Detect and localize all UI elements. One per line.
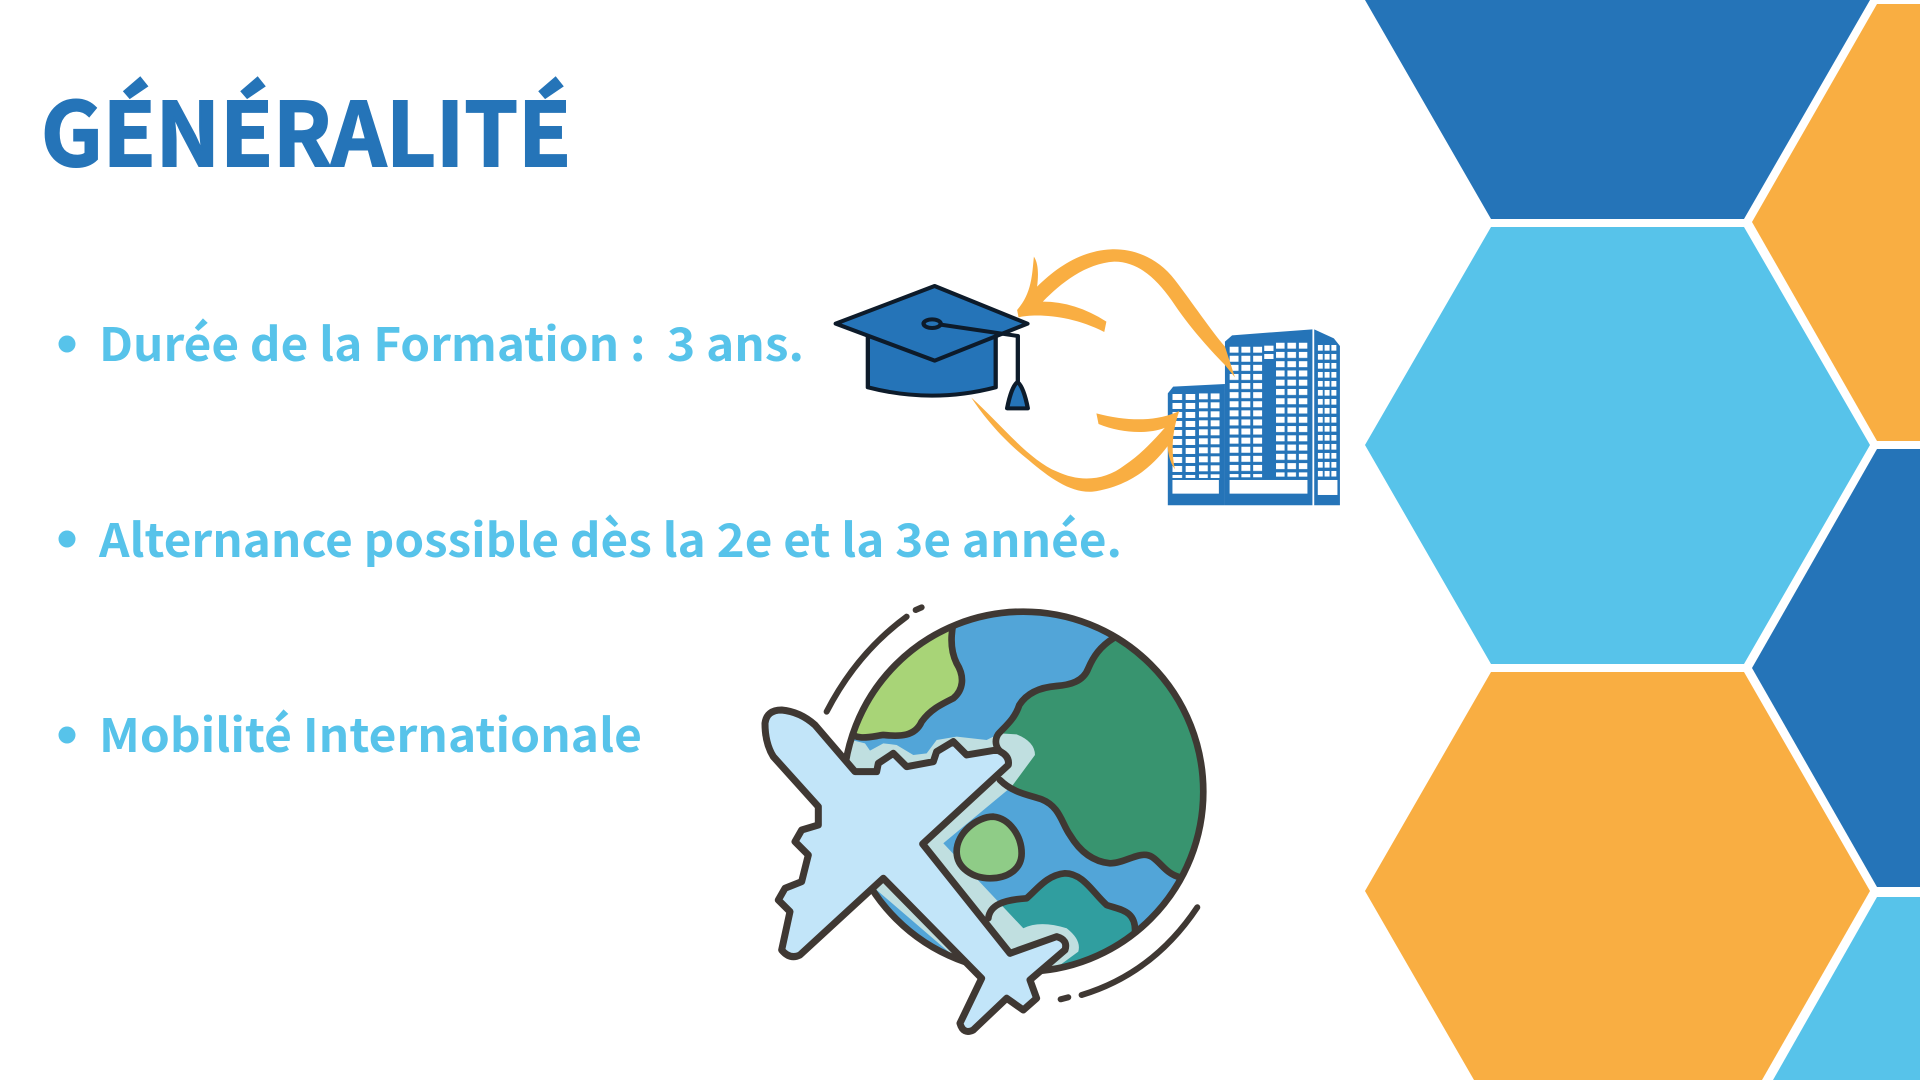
continent: teal <box>1002 876 1132 964</box>
hexagon background panel <box>1365 0 1920 1080</box>
continent: dark green <box>1003 641 1200 874</box>
arrow: school to company <box>971 398 1179 492</box>
plane shadow <box>845 733 1079 970</box>
coastlines <box>847 623 1180 933</box>
diagram: school and company exchange <box>836 249 1340 505</box>
hexagon: bottom orange <box>1365 672 1870 1080</box>
bullet item: work-study: Alternance possible dès la 2e et la 3e année. <box>98 505 1122 571</box>
bullet item: international mobility: Mobilité Internationale <box>99 700 642 766</box>
continent: light green <box>856 632 959 734</box>
bullet item: duration: Durée de la Formation : 3 ans. <box>99 309 804 375</box>
globe <box>844 608 1207 974</box>
island <box>957 817 1022 878</box>
icon: office buildings <box>1168 329 1340 505</box>
airplane <box>765 710 1066 1031</box>
hexagon: top dark blue <box>1365 0 1870 219</box>
motion lines <box>827 607 1197 999</box>
hexagon: right orange <box>1752 4 1920 441</box>
hexagon: right dark blue <box>1752 449 1920 887</box>
title: GÉNÉRALITÉ <box>41 65 571 192</box>
illustration: globe and plane <box>765 607 1240 1031</box>
arrow: company to school <box>1017 249 1235 377</box>
hexagon: right light blue <box>1773 897 1920 1080</box>
hexagon: centre light blue <box>1365 227 1870 664</box>
icon: graduation cap <box>836 286 1028 408</box>
bullet list <box>58 309 1122 766</box>
arrow head: school to company <box>1096 411 1179 469</box>
